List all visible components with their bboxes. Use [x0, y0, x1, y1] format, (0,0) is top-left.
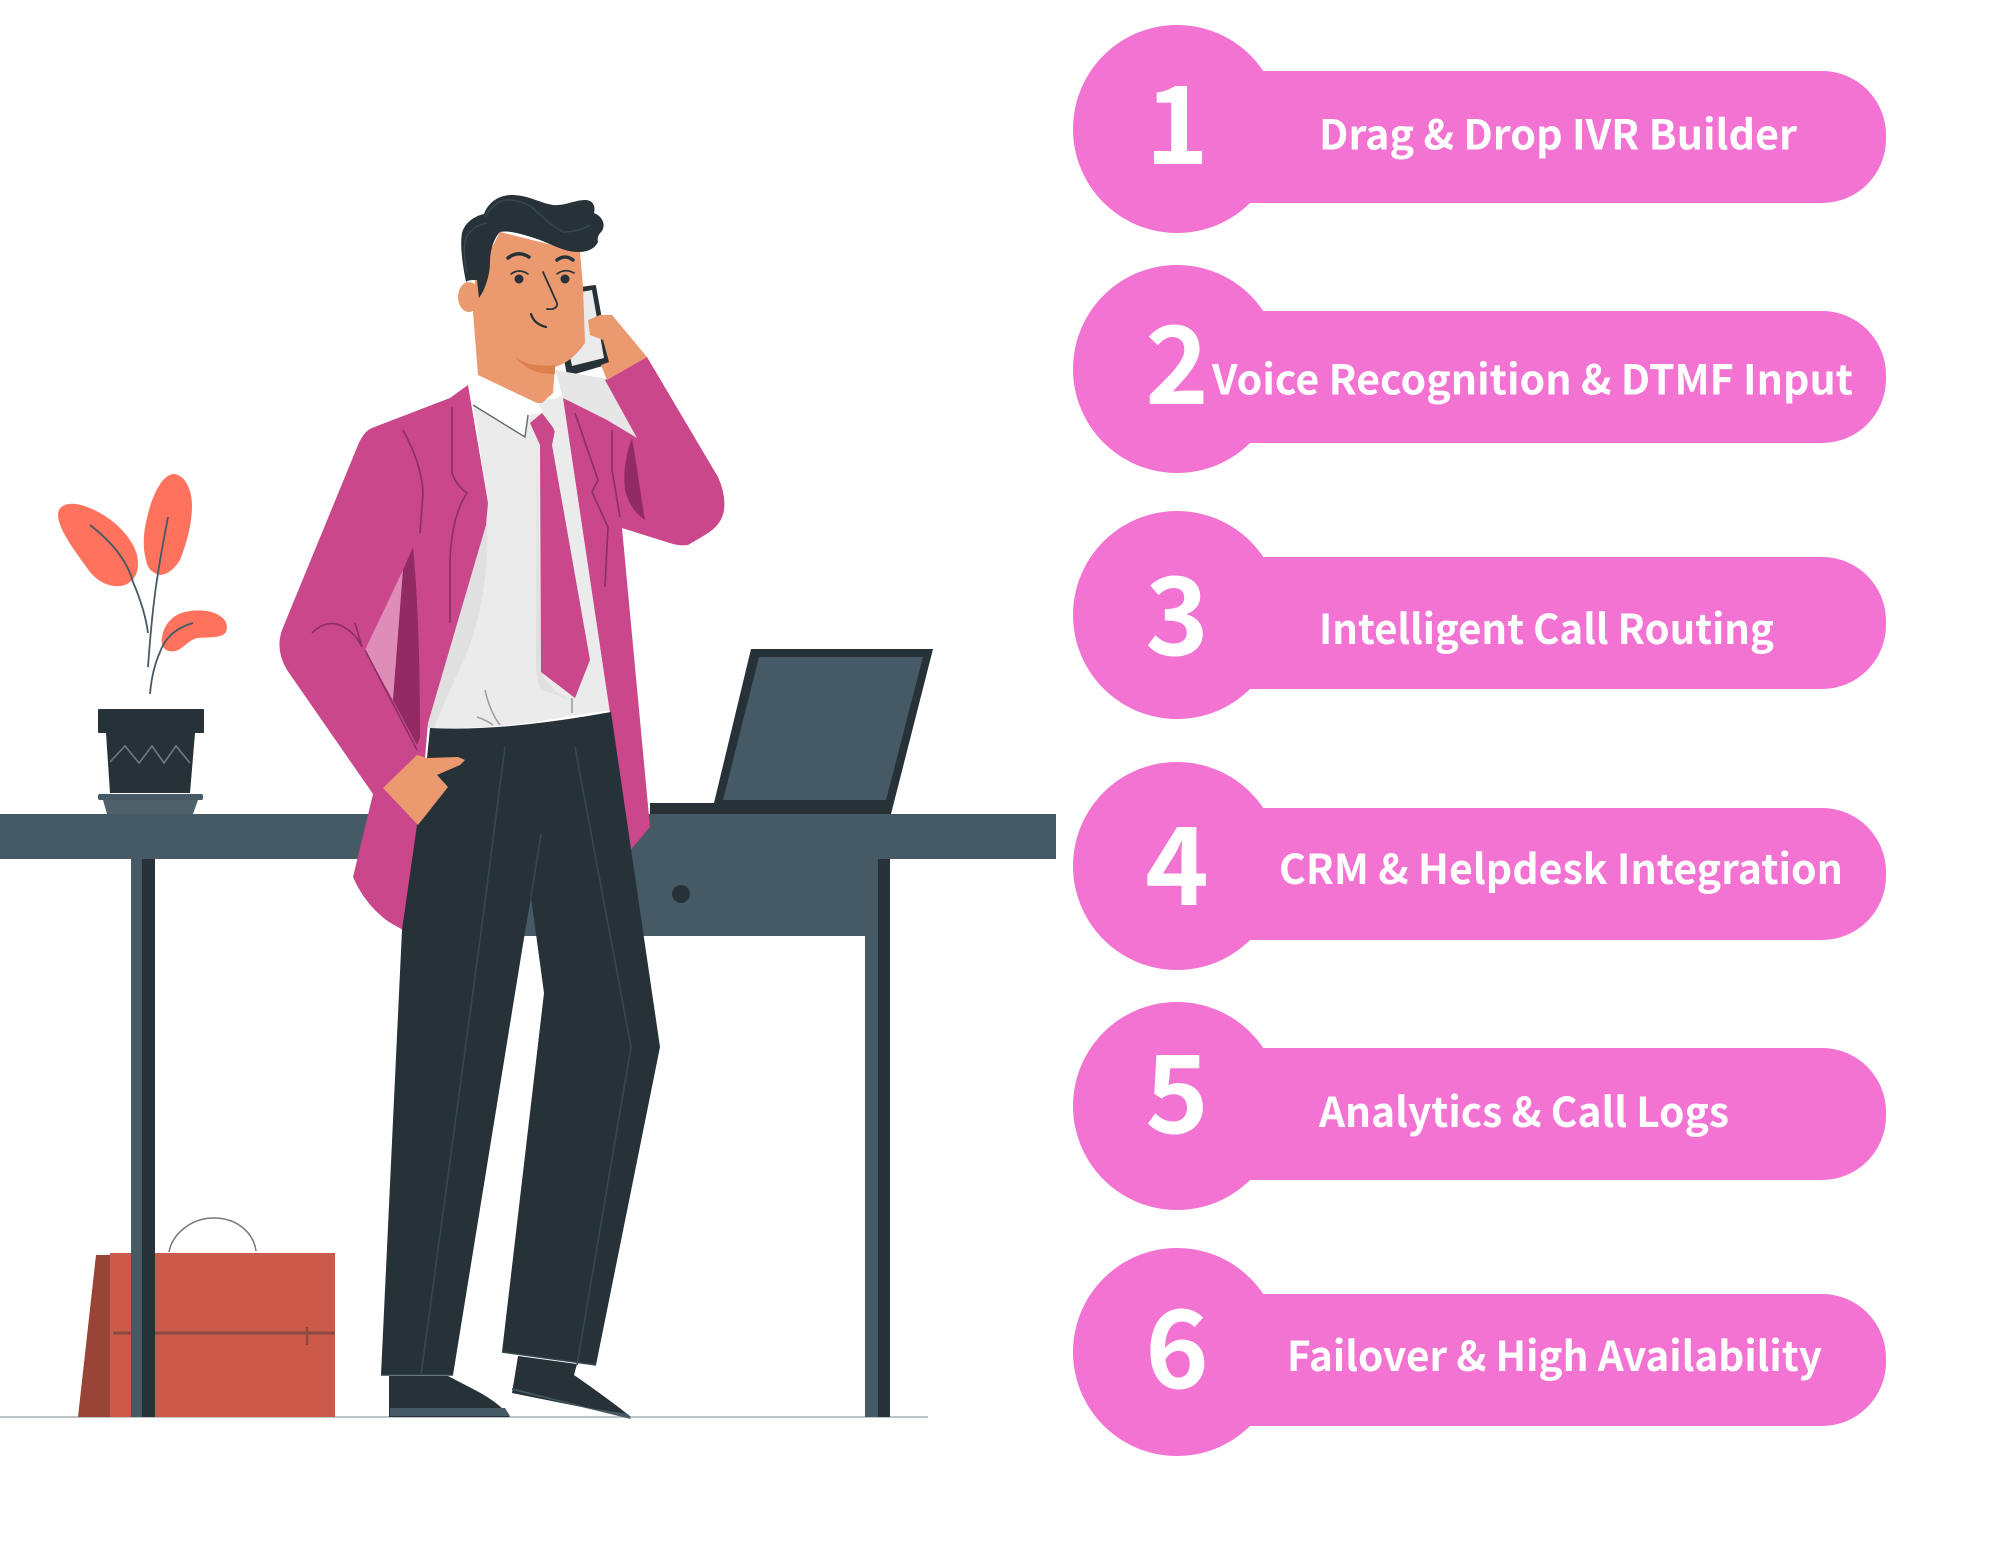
phone screen [558, 290, 604, 366]
feature 5: Analytics & Call Logs [1073, 1002, 1886, 1210]
icon: laptop [650, 649, 933, 814]
feature 2: Voice Recognition & DTMF Input: 2 [1145, 280, 1209, 436]
floor line [0, 1416, 928, 1418]
illustration: man on phone at desk [0, 195, 1056, 1419]
feature 1: Drag & Drop IVR Builder [1073, 25, 1886, 233]
feature 3: Intelligent Call Routing: Intelligent Call Routing [1319, 596, 1774, 656]
feature 2: Voice Recognition & DTMF Input [1073, 265, 1886, 473]
feature 3: Intelligent Call Routing [1073, 511, 1886, 719]
tie [530, 413, 590, 698]
feature 6: Failover & High Availability: 6 [1145, 1264, 1209, 1420]
feature 5: Analytics & Call Logs: 5 [1145, 1009, 1209, 1165]
feature 4: CRM & Helpdesk Integration: 4 [1145, 781, 1209, 937]
head [458, 195, 604, 403]
feature 5: Analytics & Call Logs: Analytics & Call Logs [1318, 1079, 1729, 1139]
feature 3: Intelligent Call Routing: 3 [1145, 531, 1209, 687]
man figure [279, 195, 724, 1419]
collar [470, 375, 567, 437]
feature 1: Drag & Drop IVR Builder: 1 [1145, 40, 1209, 196]
icon: potted plant [58, 474, 227, 814]
feature 1: Drag & Drop IVR Builder: Drag & Drop IVR Builder [1319, 102, 1797, 162]
hand in pocket [383, 755, 465, 825]
feature 4: CRM & Helpdesk Integration [1073, 762, 1886, 970]
phone behind face [552, 286, 609, 375]
shirt [428, 370, 637, 728]
feature 4: CRM & Helpdesk Integration: CRM & Helpdesk Integration [1279, 836, 1843, 896]
icon: briefcase [78, 1218, 335, 1417]
hand holding phone [588, 315, 647, 380]
feature 2: Voice Recognition & DTMF Input: Voice Recognition & DTMF Input [1211, 346, 1853, 406]
feature 6: Failover & High Availability [1073, 1248, 1886, 1456]
feature list [1073, 25, 1886, 1456]
feature 6: Failover & High Availability: Failover & High Availability [1287, 1323, 1822, 1383]
jacket [279, 357, 724, 930]
trousers and shoes [381, 712, 660, 1419]
desk [0, 814, 1056, 1417]
